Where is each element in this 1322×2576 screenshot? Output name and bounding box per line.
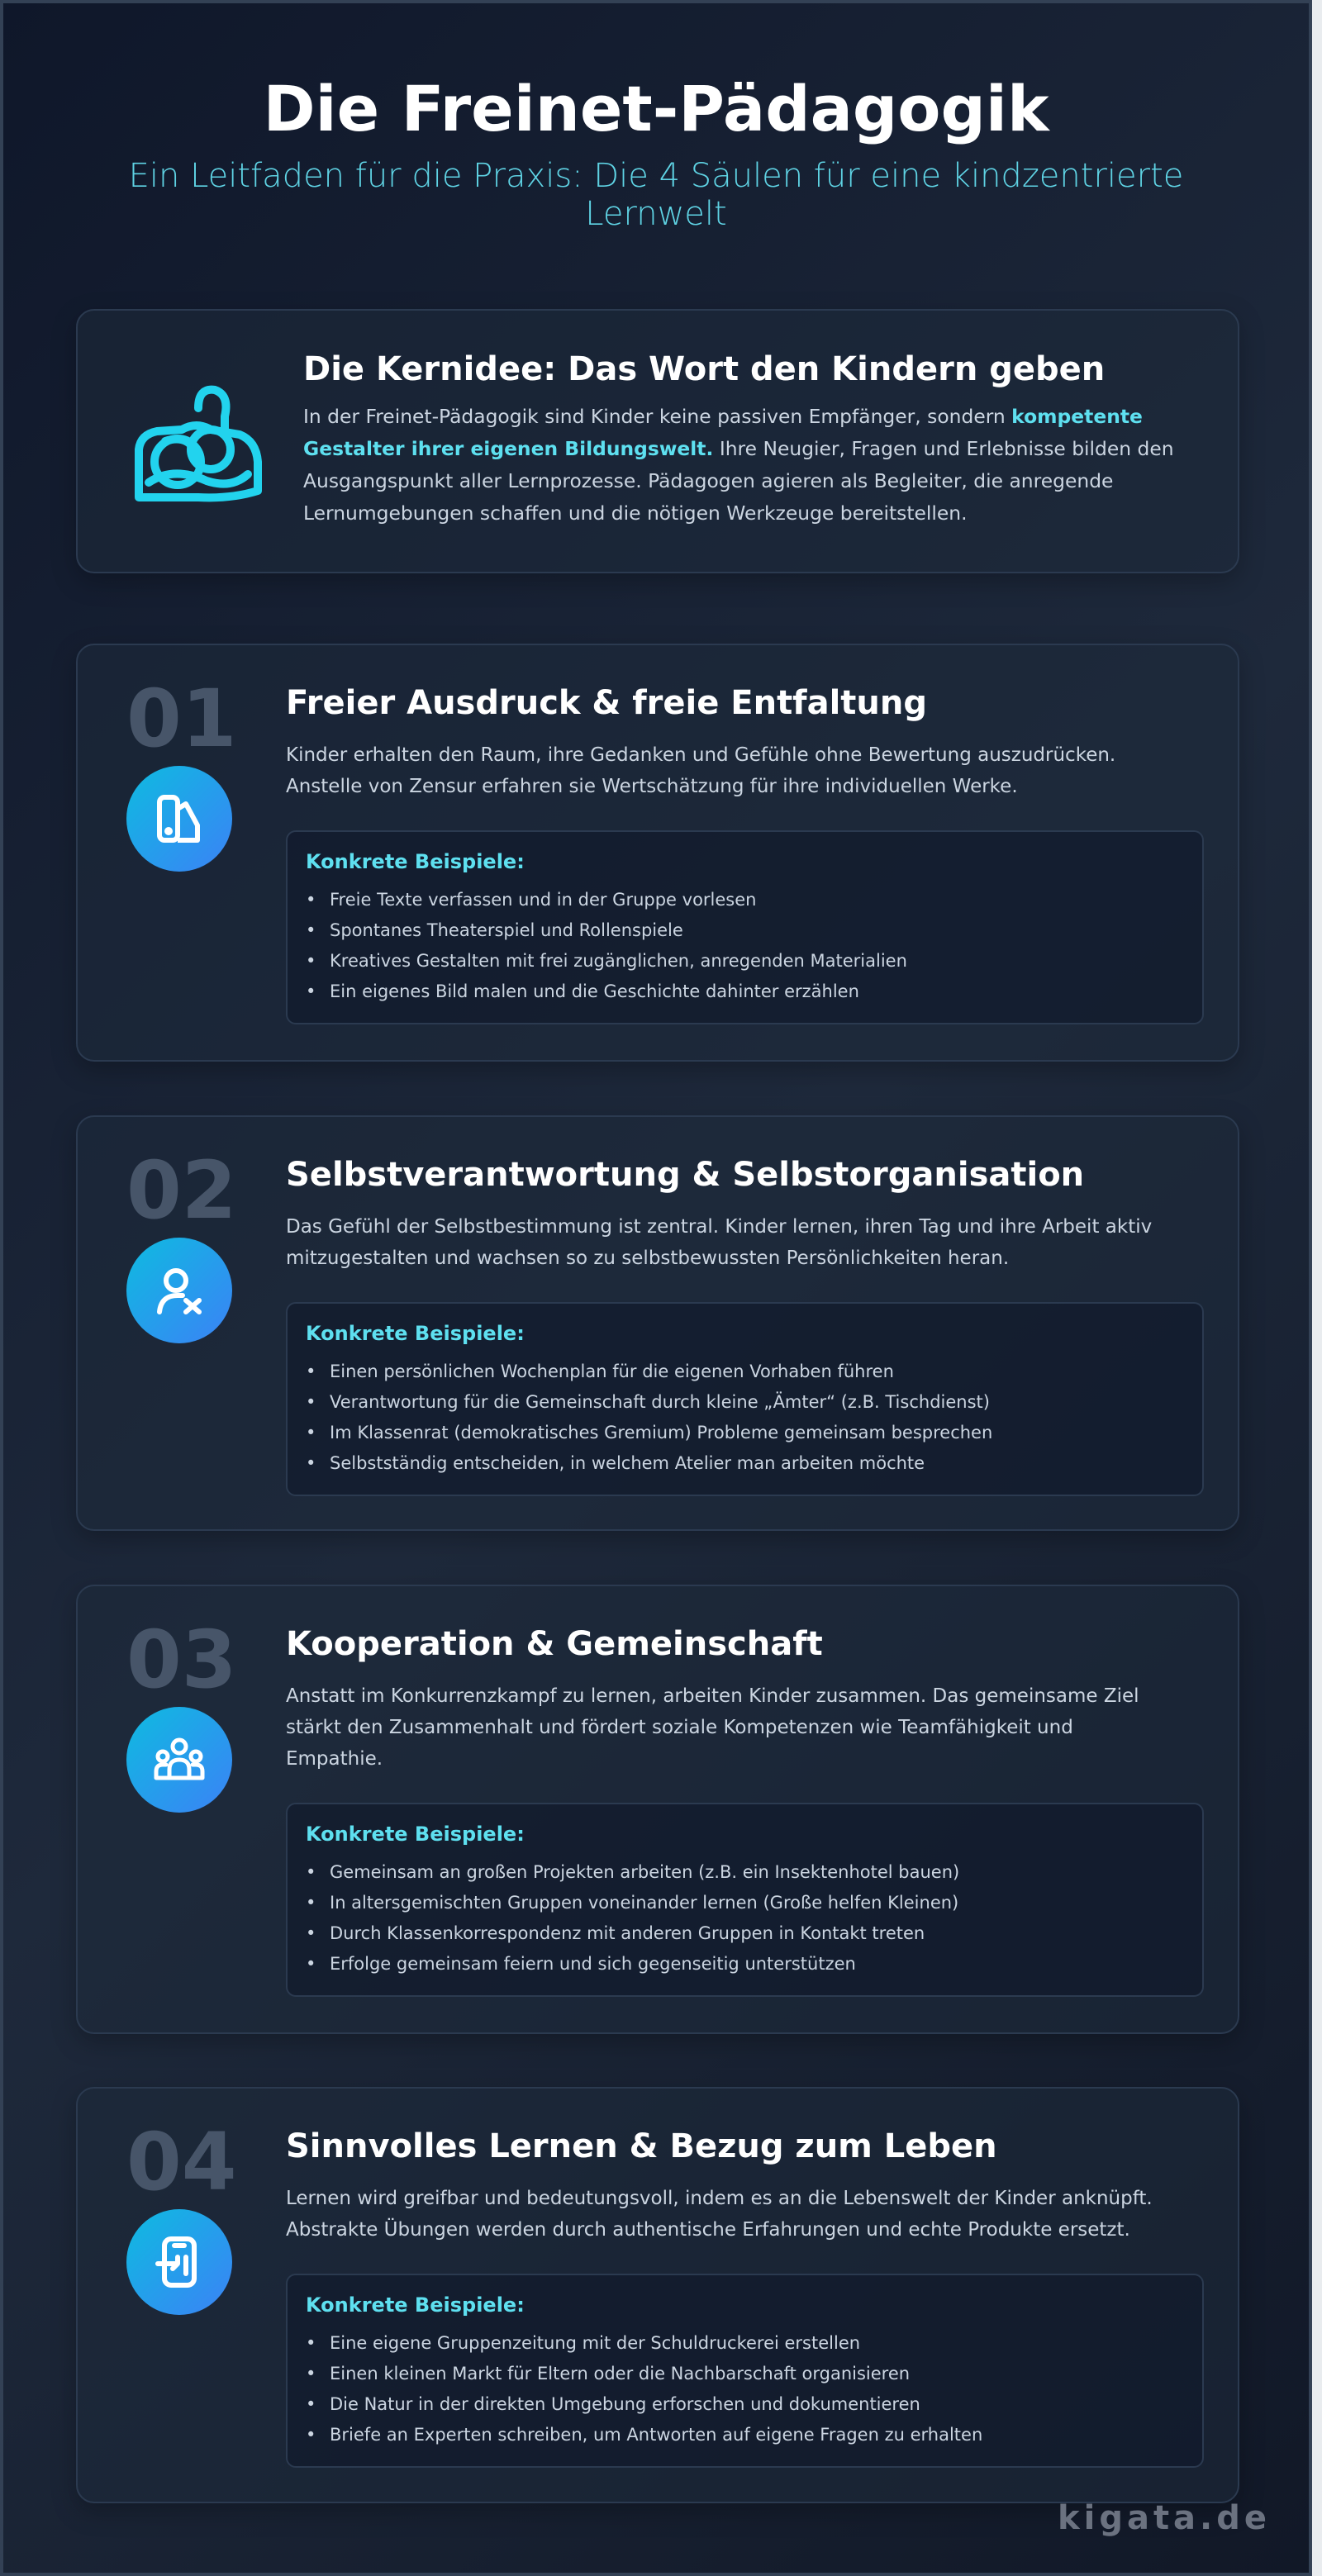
text block: core idea xyxy=(303,350,1174,525)
panel: pillar 2 xyxy=(76,1115,1239,1531)
text block: core idea: In der Freinet-Pädagogik sind Kinder keine passiven Empfänger, sondern kompetente Gestalter ihrer eigenen Bildungswelt. Ihre Neugier, Fragen und Erlebnisse bilden den Ausgangspunkt aller Lernprozesse. Pädagogen agieren als Begleiter, die anregende Lernumgebungen schaffen und die nötigen Werkzeuge bereitstellen. xyxy=(303,405,1174,525)
examples box: Konkrete Beispiele: xyxy=(306,2293,525,2317)
content: pillar 1 xyxy=(286,684,1204,1024)
examples box: Gemeinsam an großen Projekten arbeiten (z.B. ein Insektenhotel bauen) xyxy=(330,1862,959,1882)
examples box: Erfolge gemeinsam feiern und sich gegenseitig unterstützen xyxy=(330,1954,856,1974)
examples box: Im Klassenrat (demokratisches Gremium) Probleme gemeinsam besprechen xyxy=(330,1423,992,1442)
footer: brand: kigata.de xyxy=(1058,2499,1271,2537)
examples box: Selbstständig entscheiden, in welchem Atelier man arbeiten möchte xyxy=(330,1453,925,1473)
content: pillar 3: Anstatt im Konkurrenzkampf zu lernen, arbeiten Kinder zusammen. Das gemeinsame Ziel stärkt den Zusammenhalt und fördert soziale Kompetenzen wie Teamfähigkeit und Empathie. xyxy=(286,1685,1139,1770)
icon: person xyxy=(126,1238,232,1343)
examples box xyxy=(286,830,1204,1024)
examples box: Verantwortung für die Gemeinschaft durch kleine „Ämter“ (z.B. Tischdienst) xyxy=(330,1392,990,1412)
icon: group xyxy=(126,1707,232,1813)
icon: palette xyxy=(126,766,232,872)
subtitle: Ein Leitfaden für die Praxis: Die 4 Säulen für eine kindzentrierte Lernwelt xyxy=(129,157,1183,233)
content: pillar 2 xyxy=(286,1156,1204,1496)
panel: pillar 1 xyxy=(76,644,1239,1062)
content: pillar 2: Selbstverantwortung & Selbstorganisation xyxy=(286,1156,1084,1194)
text block: core idea: Die Kernidee: Das Wort den Kindern geben xyxy=(303,350,1105,388)
examples box: Ein eigenes Bild malen und die Geschichte dahinter erzählen xyxy=(330,981,859,1001)
examples box: Konkrete Beispiele: xyxy=(306,850,525,873)
examples box xyxy=(286,1302,1204,1496)
number 04: 04 xyxy=(126,2116,237,2208)
examples box: Einen kleinen Markt für Eltern oder die Nachbarschaft organisieren xyxy=(330,2364,910,2384)
icon: phone with arrows xyxy=(126,2209,232,2315)
examples box: Briefe an Experten schreiben, um Antworten auf eigene Fragen zu erhalten xyxy=(330,2425,982,2445)
panel: core idea xyxy=(76,309,1239,573)
examples box: Konkrete Beispiele: xyxy=(306,1823,525,1846)
panel: pillar 3 xyxy=(76,1585,1239,2034)
number 02: 02 xyxy=(126,1144,237,1237)
content: pillar 3 xyxy=(286,1625,1204,1997)
number 03: 03 xyxy=(126,1614,237,1706)
content: pillar 1: Freier Ausdruck & freie Entfaltung xyxy=(286,684,927,722)
icon: hands xyxy=(135,385,262,502)
examples box: Eine eigene Gruppenzeitung mit der Schuldruckerei erstellen xyxy=(330,2333,860,2353)
examples box xyxy=(286,2274,1204,2468)
examples box: Einen persönlichen Wochenplan für die eigenen Vorhaben führen xyxy=(330,1362,894,1381)
number 01: 01 xyxy=(126,673,237,765)
examples box: Durch Klassenkorrespondenz mit anderen Gruppen in Kontakt treten xyxy=(330,1923,925,1943)
examples box: Konkrete Beispiele: xyxy=(306,1322,525,1345)
examples box: Kreatives Gestalten mit frei zugänglichen, anregenden Materialien xyxy=(330,951,907,971)
content: pillar 4: Lernen wird greifbar und bedeutungsvoll, indem es an die Lebenswelt der Kinder anknüpft. Abstrakte Übungen werden durch authentische Erfahrungen und echte Produkte ersetzt. xyxy=(286,2188,1153,2241)
content: pillar 2: Das Gefühl der Selbstbestimmung ist zentral. Kinder lernen, ihren Tag und ihre Arbeit aktiv mitzugestalten und wachsen so zu selbstbewussten Persönlichkeiten heran. xyxy=(286,1216,1152,1269)
content: pillar 4: Sinnvolles Lernen & Bezug zum Leben xyxy=(286,2127,997,2165)
examples box: Freie Texte verfassen und in der Gruppe vorlesen xyxy=(330,890,756,910)
title: Die Freinet-Pädagogik xyxy=(263,72,1049,145)
content: pillar 4 xyxy=(286,2127,1204,2468)
content: pillar 3: Kooperation & Gemeinschaft xyxy=(286,1625,823,1663)
panel: pillar 4 xyxy=(76,2087,1239,2503)
examples box: Spontanes Theaterspiel und Rollenspiele xyxy=(330,920,683,940)
examples box: Die Natur in der direkten Umgebung erforschen und dokumentieren xyxy=(330,2394,920,2414)
examples box: In altersgemischten Gruppen voneinander lernen (Große helfen Kleinen) xyxy=(330,1893,958,1913)
examples box xyxy=(286,1803,1204,1997)
content: pillar 1: Kinder erhalten den Raum, ihre Gedanken und Gefühle ohne Bewertung auszudrücken. Anstelle von Zensur erfahren sie Wertschätzung für ihre individuellen Werke. xyxy=(286,744,1115,797)
